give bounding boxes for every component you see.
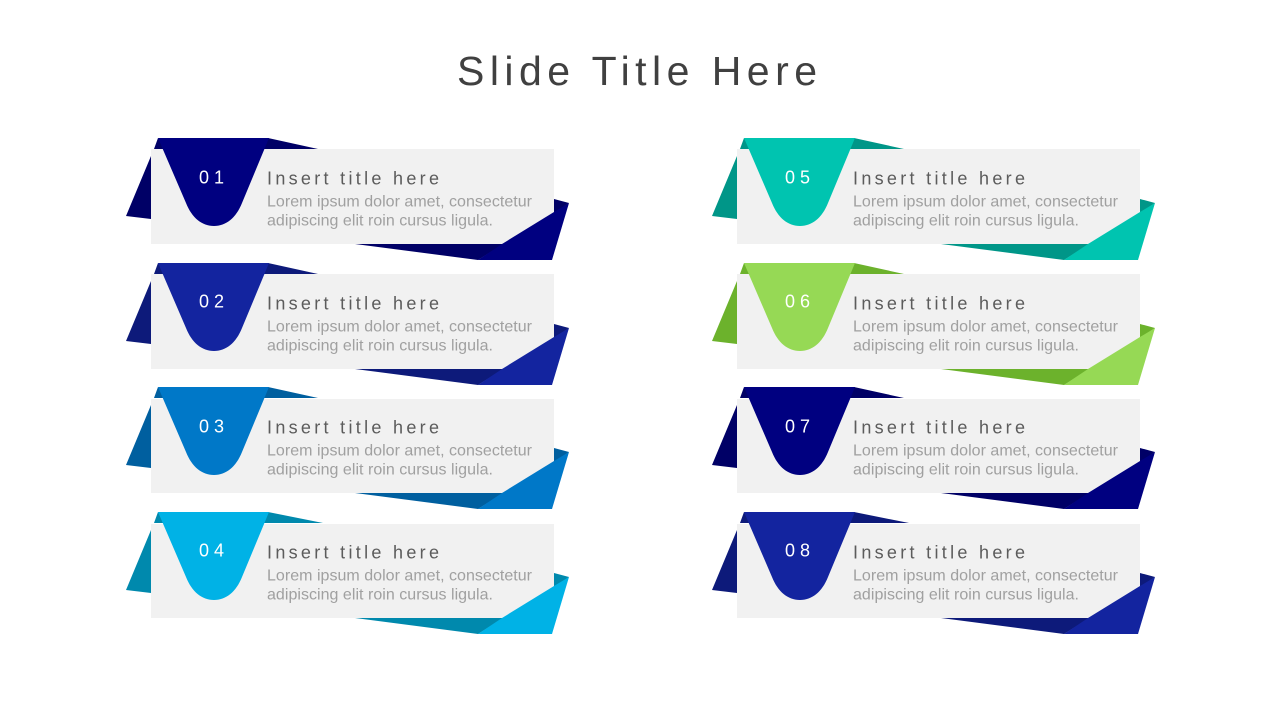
item body: Lorem ipsum dolor amet, consectetur <box>267 568 533 584</box>
item body: Lorem ipsum dolor amet, consectetur <box>267 318 533 336</box>
back folds <box>126 387 569 509</box>
card <box>151 524 554 618</box>
back folds <box>126 263 569 385</box>
number tab <box>744 263 855 351</box>
item body: adipiscing elit roin cursus ligula. <box>267 212 493 230</box>
item body: Lorem ipsum dolor amet, consectetur <box>267 194 533 210</box>
number: 06 <box>785 292 810 312</box>
item body: adipiscing elit roin cursus ligula. <box>853 212 1079 230</box>
item body: adipiscing elit roin cursus ligula. <box>267 462 493 478</box>
back folds <box>712 138 1155 260</box>
number tab <box>158 387 269 475</box>
back folds <box>712 263 1155 385</box>
number tab <box>744 387 855 475</box>
panel: item 05 <box>712 138 1155 260</box>
card <box>737 149 1140 244</box>
front fold <box>1064 203 1155 260</box>
number tab <box>744 138 855 226</box>
item body: Lorem ipsum dolor amet, consectetur <box>853 194 1119 210</box>
number tab <box>158 138 269 226</box>
item body: adipiscing elit roin cursus ligula. <box>853 338 1079 354</box>
front fold <box>1064 452 1155 509</box>
panel: item 03 <box>126 387 569 509</box>
card <box>737 274 1140 369</box>
number: 02 <box>199 292 224 312</box>
number tab <box>158 263 269 351</box>
number: 04 <box>199 540 224 560</box>
panel: item 01 <box>126 138 569 260</box>
item body: adipiscing elit roin cursus ligula. <box>267 338 493 354</box>
item title: Insert title here <box>853 168 1025 188</box>
panel: item 04 <box>126 512 569 634</box>
number: 03 <box>199 416 224 436</box>
back folds <box>126 512 569 634</box>
title: Slide Title Here <box>457 48 817 94</box>
back folds <box>712 512 1155 634</box>
panel: item 02 <box>126 263 569 385</box>
card <box>151 274 554 369</box>
item body: Lorem ipsum dolor amet, consectetur <box>267 442 533 460</box>
number: 05 <box>785 168 810 188</box>
front fold <box>1064 328 1155 385</box>
card <box>151 399 554 493</box>
panel: item 07 <box>712 387 1155 509</box>
panel: item 06 <box>712 263 1155 385</box>
number tab <box>158 512 269 600</box>
item title: Insert title here <box>267 168 439 188</box>
item body: Lorem ipsum dolor amet, consectetur <box>853 568 1119 584</box>
back folds <box>712 387 1155 509</box>
front fold <box>478 452 569 509</box>
number tab <box>744 512 855 600</box>
front fold <box>478 203 569 260</box>
back folds <box>126 138 569 260</box>
item title: Insert title here <box>267 418 439 438</box>
item title: Insert title here <box>267 542 439 562</box>
front fold <box>478 577 569 634</box>
item title: Insert title here <box>853 542 1025 562</box>
panel: item 08 <box>712 512 1155 634</box>
item title: Insert title here <box>853 294 1025 314</box>
number: 08 <box>785 540 810 560</box>
item body: adipiscing elit roin cursus ligula. <box>267 586 493 604</box>
item body: adipiscing elit roin cursus ligula. <box>853 586 1079 604</box>
item title: Insert title here <box>853 418 1025 438</box>
item title: Insert title here <box>267 294 439 314</box>
front fold <box>1064 577 1155 634</box>
number: 01 <box>199 168 224 188</box>
item body: Lorem ipsum dolor amet, consectetur <box>853 318 1119 336</box>
card <box>737 524 1140 618</box>
front fold <box>478 328 569 385</box>
number: 07 <box>785 416 810 436</box>
item body: adipiscing elit roin cursus ligula. <box>853 462 1079 478</box>
card <box>151 149 554 244</box>
card <box>737 399 1140 493</box>
item body: Lorem ipsum dolor amet, consectetur <box>853 442 1119 460</box>
